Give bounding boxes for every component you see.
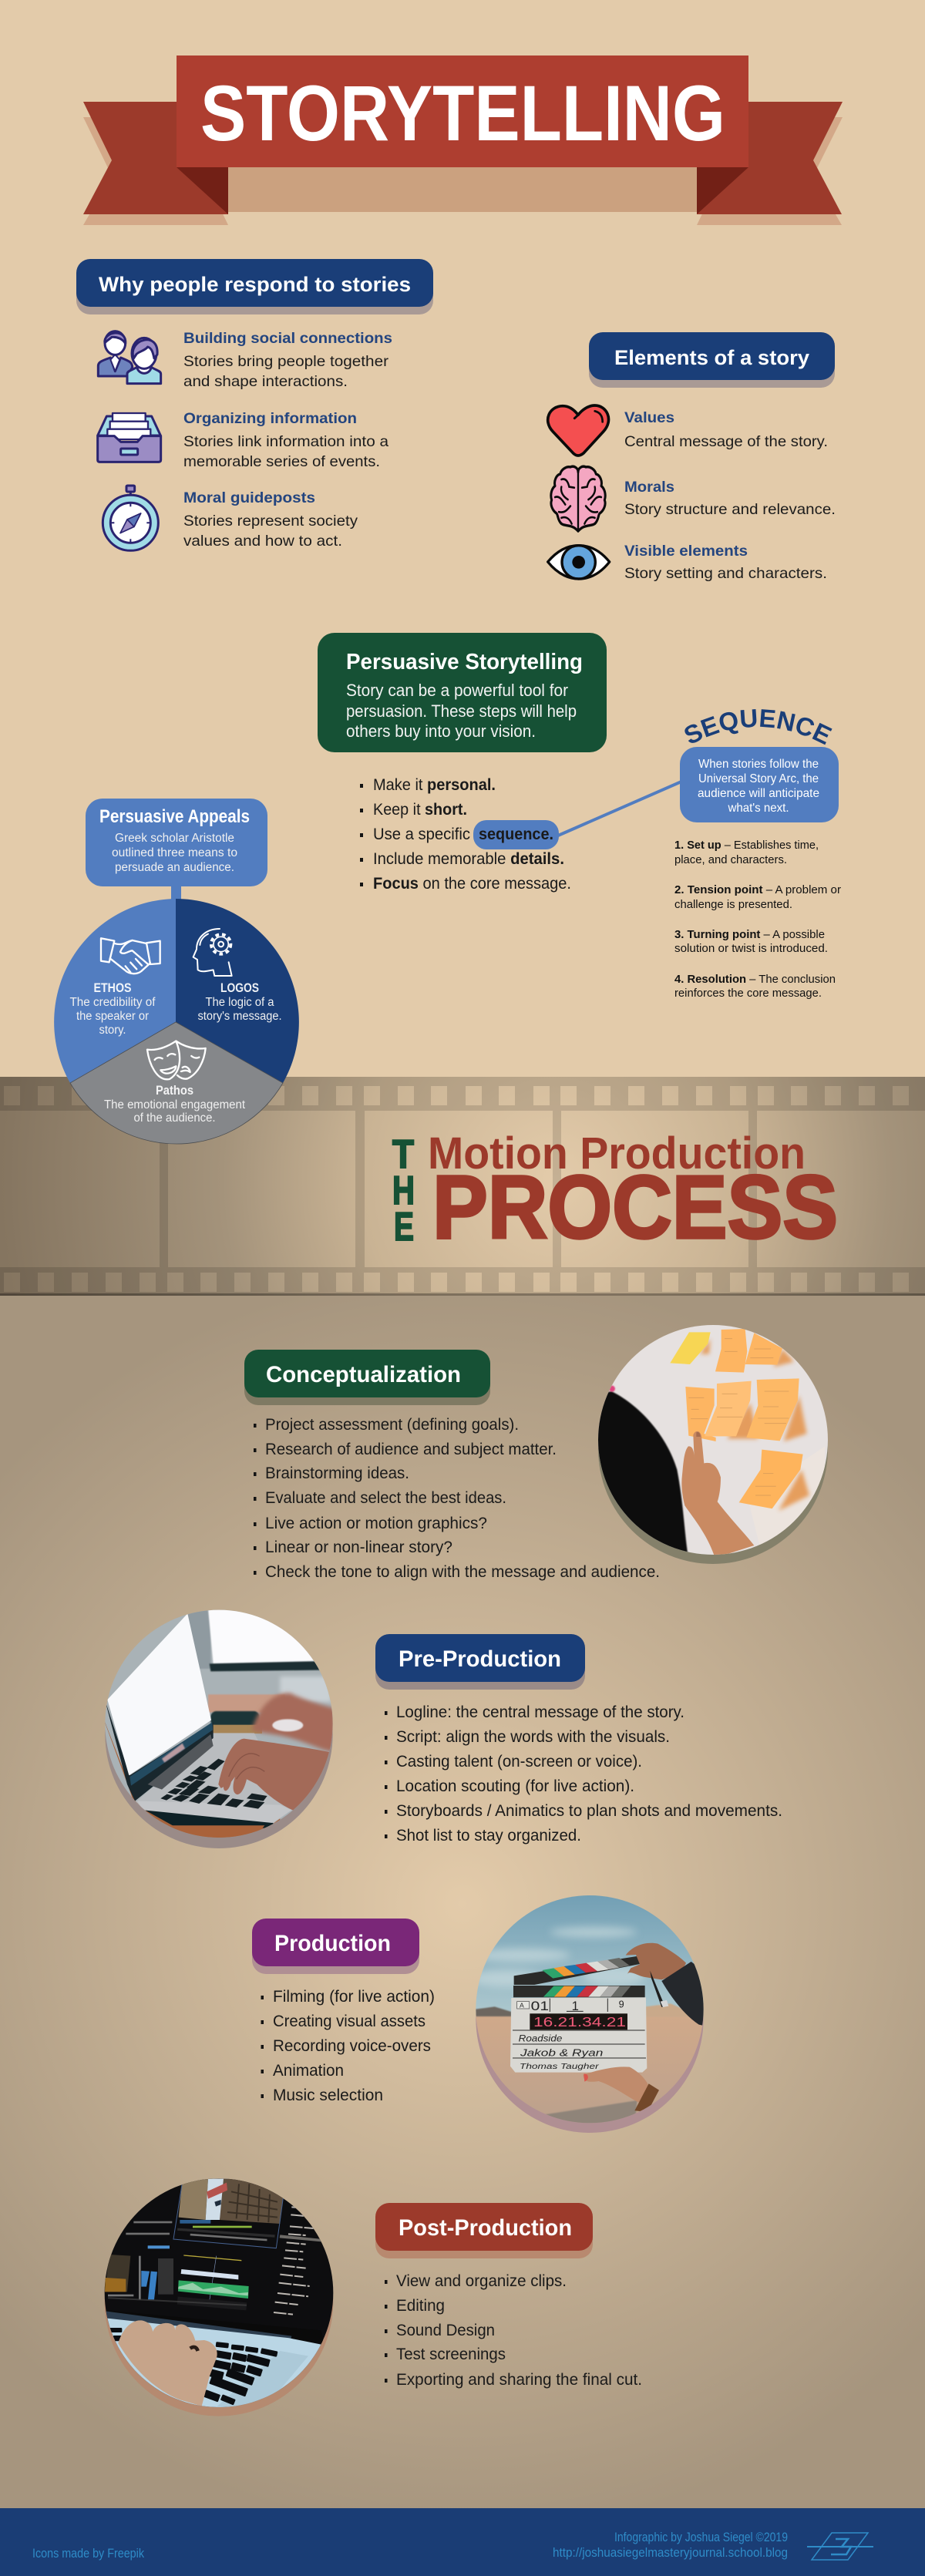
ui: right list xyxy=(280,2235,322,2241)
callout: sequence description: When stories follow the xyxy=(698,758,819,771)
banner: storytelling title ribbon xyxy=(83,55,843,225)
intro text: Story can be a powerful tool for xyxy=(346,681,568,700)
bullet list: persuasive steps: Use a specific xyxy=(373,826,470,843)
text: moral guideposts: Stories represent society xyxy=(183,513,358,530)
icon: head with gear xyxy=(193,929,232,976)
bullet list: Sound Design xyxy=(396,2322,495,2339)
hand xyxy=(118,2320,217,2406)
author credit: http://joshuasiegelmasteryjournal.school.blog xyxy=(553,2545,788,2560)
bullet list: persuasive steps: sequence. xyxy=(479,826,553,843)
bullet list: Shot list to stay organized. xyxy=(396,1827,581,1845)
callout: sequence description: audience will anticipate xyxy=(698,787,819,800)
text: moral guideposts xyxy=(183,490,358,550)
text: building social connections: and shape interactions. xyxy=(183,373,348,390)
text: moral guideposts: Moral guideposts xyxy=(183,490,315,506)
bullet list: Evaluate and select the best ideas. xyxy=(265,1489,506,1507)
background: lower section xyxy=(0,1295,925,2509)
bullet list: Logline: the central message of the story. xyxy=(396,1703,684,1721)
heading pill xyxy=(375,1634,585,1690)
text: ethos: ETHOS xyxy=(94,981,131,995)
text: morals: Story structure and relevance. xyxy=(624,501,836,518)
pie chart: three appeals xyxy=(54,899,299,1144)
text: story arc steps: 1. Set up – Establishes time, xyxy=(674,839,819,852)
callout: sequence description xyxy=(680,747,839,822)
bullet list: Recording voice-overs xyxy=(273,2037,431,2055)
text: logos xyxy=(197,981,282,1023)
text: organizing information xyxy=(183,411,388,470)
bullet list: Project assessment (defining goals). xyxy=(265,1416,519,1434)
icon: people xyxy=(98,331,161,384)
text: organizing information: memorable series of events. xyxy=(183,453,380,470)
bullet list: persuasive steps: Make it personal. xyxy=(373,776,496,794)
bullet list: Music selection xyxy=(273,2087,383,2104)
text: story arc steps: 2. Tension point – A problem or xyxy=(674,883,841,896)
text: values xyxy=(624,410,828,450)
text: story arc steps xyxy=(674,839,841,1000)
text: logos: story's message. xyxy=(197,1010,282,1023)
heading pill: Elements of a story xyxy=(614,346,809,369)
icon: compass xyxy=(103,486,158,550)
text: story arc steps: 4. Resolution – The conclusion xyxy=(674,973,836,986)
text: logos: The logic of a xyxy=(205,996,274,1009)
bullet list: persuasive steps: Keep it short. xyxy=(373,801,467,819)
appeals header box: Greek scholar Aristotle xyxy=(115,832,234,845)
heading pill: Production xyxy=(274,1931,391,1956)
photo: film clapperboard: A xyxy=(520,2002,524,2009)
icon: file tray xyxy=(98,413,161,462)
photo: film clapperboard: 1 xyxy=(572,1999,579,2013)
photo: sticky notes on wall xyxy=(594,1318,840,1565)
ui: left thumbnail xyxy=(105,2255,130,2292)
heading pill xyxy=(252,1919,419,1974)
text: morals xyxy=(624,479,836,518)
vertical word: the: H xyxy=(392,1169,415,1213)
title: the motion production process: Motion Production xyxy=(428,1128,806,1179)
bullet list: Creating visual assets xyxy=(273,2013,426,2030)
top hand xyxy=(626,1943,686,1979)
appeals header box: persuade an audience. xyxy=(115,861,234,874)
filmstrip band xyxy=(0,1077,925,1296)
photo: video editing on laptop xyxy=(100,2174,347,2420)
bullet list: Live action or motion graphics? xyxy=(265,1515,487,1532)
panel: production xyxy=(252,1888,717,2135)
icon: brain xyxy=(551,466,605,531)
intro text: others buy into your vision. xyxy=(346,721,536,741)
appeals header box xyxy=(86,799,267,902)
text: organizing information: Organizing information xyxy=(183,411,357,427)
text: organizing information: Stories link information into a xyxy=(183,433,388,450)
text: logos: LOGOS xyxy=(220,981,259,995)
bullet list: View and organize clips. xyxy=(396,2272,567,2290)
text: story arc steps: reinforces the core message. xyxy=(674,987,822,1000)
icon: theatre masks xyxy=(147,1041,206,1079)
icon: handshake xyxy=(101,938,160,974)
text: ethos: The credibility of xyxy=(69,996,156,1009)
bullet list: Brainstorming ideas. xyxy=(265,1465,409,1482)
text: ethos: story. xyxy=(99,1024,126,1037)
text: building social connections: Building social connections xyxy=(183,331,392,347)
ui: top image xyxy=(179,2179,208,2220)
heading pill: Pre-Production xyxy=(399,1646,561,1672)
logo xyxy=(807,2533,873,2560)
text: moral guideposts: values and how to act. xyxy=(183,533,342,550)
bullet list: Test screenings xyxy=(396,2346,506,2363)
clapper lower stripe xyxy=(513,1986,645,1997)
panel: conceptualization xyxy=(244,1318,840,1581)
text: ethos xyxy=(69,981,156,1037)
background: top section xyxy=(0,0,925,1079)
bullet list: Location scouting (for live action). xyxy=(396,1777,634,1795)
text: values: Values xyxy=(624,410,674,426)
photo: film clapperboard: Jakob & Ryan xyxy=(520,2046,603,2058)
heading pill: Post-Production xyxy=(399,2215,572,2241)
text: pathos xyxy=(104,1084,246,1125)
heading: Persuasive Storytelling xyxy=(346,650,583,674)
connector line to sequence xyxy=(558,782,681,836)
photo: film clapperboard: 9 xyxy=(619,1999,624,2010)
bullet list: Animation xyxy=(273,2062,344,2080)
sequence highlight pill xyxy=(473,820,559,849)
intro text: persuasion. These steps will help xyxy=(346,701,577,721)
text: visible elements: Story setting and characters. xyxy=(624,565,827,582)
text: pathos: of the audience. xyxy=(134,1111,216,1125)
bullet list: Script: align the words with the visuals. xyxy=(396,1728,670,1746)
photo: film clapperboard: Roadside xyxy=(519,2033,563,2044)
heading pill: Conceptualization xyxy=(266,1362,461,1387)
icon: eye xyxy=(548,546,610,579)
curved heading: sequence: SEQUENCE xyxy=(684,709,832,745)
bullet list: Check the tone to align with the message and audience. xyxy=(265,1563,660,1581)
text: values: Central message of the story. xyxy=(624,433,828,450)
panel: pre-production xyxy=(100,1607,782,1854)
bullet list: Linear or non-linear story? xyxy=(265,1539,452,1556)
bullet list: Casting talent (on-screen or voice). xyxy=(396,1753,642,1771)
photo: typing on laptop xyxy=(105,1609,333,1848)
text: pathos: The emotional engagement xyxy=(104,1098,246,1111)
text: story arc steps: challenge is presented. xyxy=(674,898,792,911)
text: story arc steps: solution or twist is introduced. xyxy=(674,942,828,955)
title: the motion production process: PROCESS xyxy=(432,1157,838,1257)
text: visible elements xyxy=(624,543,827,582)
heading pill xyxy=(589,332,835,388)
laptop xyxy=(100,2310,324,2343)
bullet list: Exporting and sharing the final cut. xyxy=(396,2371,642,2389)
text: building social connections: Stories bring people together xyxy=(183,353,389,370)
panel: persuasive storytelling xyxy=(318,633,607,752)
icon: heart xyxy=(548,405,609,456)
callout: sequence description: what's next. xyxy=(728,802,789,815)
vertical word: the xyxy=(392,1132,415,1249)
text: visible elements: Visible elements xyxy=(624,543,748,560)
text: story arc steps: 3. Turning point – A possible xyxy=(674,928,825,941)
ui: timeline xyxy=(183,2255,241,2261)
heading pill xyxy=(76,259,433,314)
intro text xyxy=(346,681,577,741)
bullet list xyxy=(385,2272,642,2389)
bullet list: persuasive steps xyxy=(360,776,571,893)
footer xyxy=(0,2508,925,2576)
callout: sequence description: Universal Story Arc, the xyxy=(698,772,819,785)
appeals header box: Persuasive Appeals xyxy=(99,806,250,827)
vertical word: the: T xyxy=(392,1132,414,1177)
heading pill: Why people respond to stories xyxy=(99,273,411,296)
panel: persuasive appeals xyxy=(54,799,299,1144)
bullet list: Research of audience and subject matter. xyxy=(265,1441,557,1458)
title: the motion production process xyxy=(392,1128,838,1257)
text: pathos: Pathos xyxy=(156,1084,193,1098)
text: morals: Morals xyxy=(624,479,674,496)
clapper board xyxy=(510,1997,647,2073)
bullet list: Storyboards / Animatics to plan shots and movements. xyxy=(396,1802,782,1820)
appeals header box: outlined three means to xyxy=(112,846,237,859)
bullet list: Editing xyxy=(396,2297,445,2315)
bullet list xyxy=(254,1416,660,1581)
photo: film clapperboard: Thomas Taugher xyxy=(520,2063,600,2071)
clapper top arm xyxy=(514,1956,642,1985)
bullet list: persuasive steps: Include memorable details. xyxy=(373,850,564,868)
text: ethos: the speaker or xyxy=(76,1010,149,1023)
bullet list xyxy=(261,1988,435,2104)
bullet list: Filming (for live action) xyxy=(273,1988,435,2006)
text: building social connections xyxy=(183,331,392,390)
bullet list: persuasive steps: Focus on the core message. xyxy=(373,875,571,893)
photo: film clapperboard xyxy=(476,1895,704,2133)
photo: film clapperboard: 01 xyxy=(531,1999,549,2013)
author credit: Infographic by Joshua Siegel ©2019 xyxy=(614,2530,788,2544)
panel: why people respond to stories xyxy=(76,259,433,550)
author credit xyxy=(553,2530,788,2560)
icon credit: Icons made by Freepik xyxy=(32,2546,144,2561)
heading pill xyxy=(244,1350,490,1405)
vertical word: the: E xyxy=(394,1205,414,1249)
title: STORYTELLING xyxy=(200,69,725,157)
bottom hand xyxy=(584,2067,650,2103)
bullet list xyxy=(385,1703,782,1845)
photo: film clapperboard: 16.21.34.21 xyxy=(533,2014,626,2030)
panel: post-production xyxy=(100,2174,642,2420)
heading pill xyxy=(375,2203,593,2258)
panel: elements of a story xyxy=(548,332,836,582)
text: story arc steps: place, and characters. xyxy=(674,853,787,866)
